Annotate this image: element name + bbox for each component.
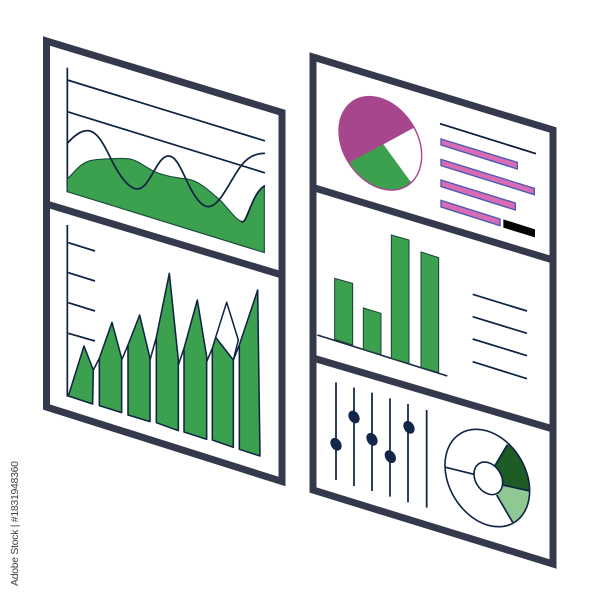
text placeholder lines bbox=[473, 294, 527, 379]
stock id text: Adobe Stock | #1831948360 bbox=[9, 461, 21, 586]
spike bar chart bbox=[67, 225, 260, 456]
column chart section bbox=[317, 235, 527, 379]
left board frame bbox=[46, 41, 282, 482]
spike bars bbox=[68, 273, 260, 456]
panel: right board bbox=[313, 57, 553, 564]
black legend block bbox=[503, 219, 535, 237]
pie chart bbox=[338, 96, 422, 191]
green area series bbox=[67, 158, 264, 253]
axis and tick marks bbox=[67, 225, 95, 397]
legend pink bars bbox=[441, 139, 534, 226]
green columns bbox=[335, 235, 439, 373]
chart axis and grid lines bbox=[67, 68, 264, 192]
column baseline bbox=[317, 335, 447, 376]
sliders and donut section bbox=[330, 382, 530, 528]
right board frame bbox=[313, 57, 553, 564]
area and line chart bbox=[67, 68, 264, 253]
connector lines between spikes bbox=[93, 337, 239, 370]
slider knobs bbox=[330, 409, 415, 464]
legend heading line bbox=[440, 124, 536, 154]
panel: left board bbox=[46, 41, 282, 482]
pie and legend section bbox=[333, 86, 536, 237]
donut chart bbox=[444, 428, 530, 528]
white spike tip bbox=[216, 302, 238, 360]
slider tracks bbox=[336, 382, 427, 508]
wave line series bbox=[67, 131, 264, 222]
